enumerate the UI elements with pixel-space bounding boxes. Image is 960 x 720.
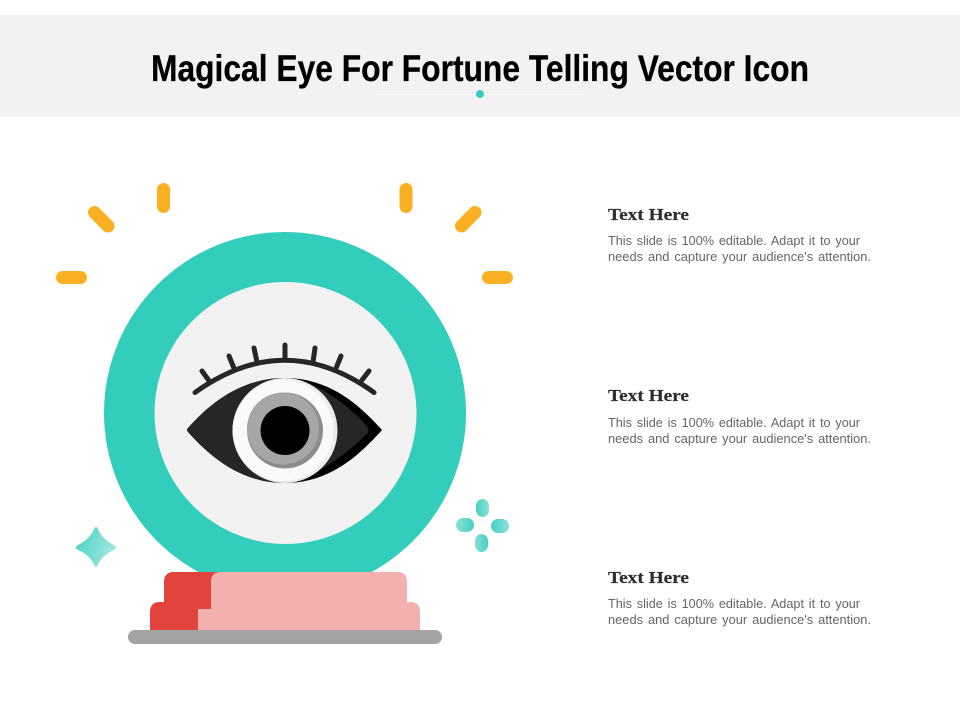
- text block 1: needs and capture your audience's attention.: [608, 250, 871, 264]
- text block 1: Text Here: [608, 205, 690, 224]
- iris: [247, 392, 323, 468]
- ball stand: [128, 572, 442, 644]
- text block 2: [608, 386, 871, 446]
- pupil: [260, 406, 310, 455]
- stand shadow side: [150, 572, 240, 630]
- text block 2: This slide is 100% editable. Adapt it to your: [608, 416, 860, 430]
- text block 3: This slide is 100% editable. Adapt it to your: [608, 597, 860, 611]
- title accent dot: [476, 90, 484, 98]
- eye outline: [187, 378, 382, 483]
- header band: [0, 15, 960, 117]
- text block 1: [608, 205, 871, 264]
- stand plate: [128, 630, 442, 644]
- text block 3: [608, 568, 871, 627]
- text block 2: Text Here: [608, 386, 690, 405]
- icon: diamond sparkle: [76, 527, 116, 567]
- icon: rays: [62, 190, 506, 278]
- title: Magical Eye For Fortune Telling Vector Icon: [151, 48, 809, 89]
- icon: eye: [187, 345, 382, 483]
- text block 3: needs and capture your audience's attention.: [608, 613, 871, 627]
- eyelash arc: [195, 345, 374, 392]
- text block 3: Text Here: [608, 568, 690, 587]
- sclera: [232, 378, 338, 483]
- stand light side: [198, 572, 420, 630]
- text block 2: needs and capture your audience's attention.: [608, 432, 871, 446]
- text block 1: This slide is 100% editable. Adapt it to your: [608, 234, 860, 248]
- crystal ball: [104, 232, 466, 594]
- icon: four petal sparkle: [456, 499, 509, 552]
